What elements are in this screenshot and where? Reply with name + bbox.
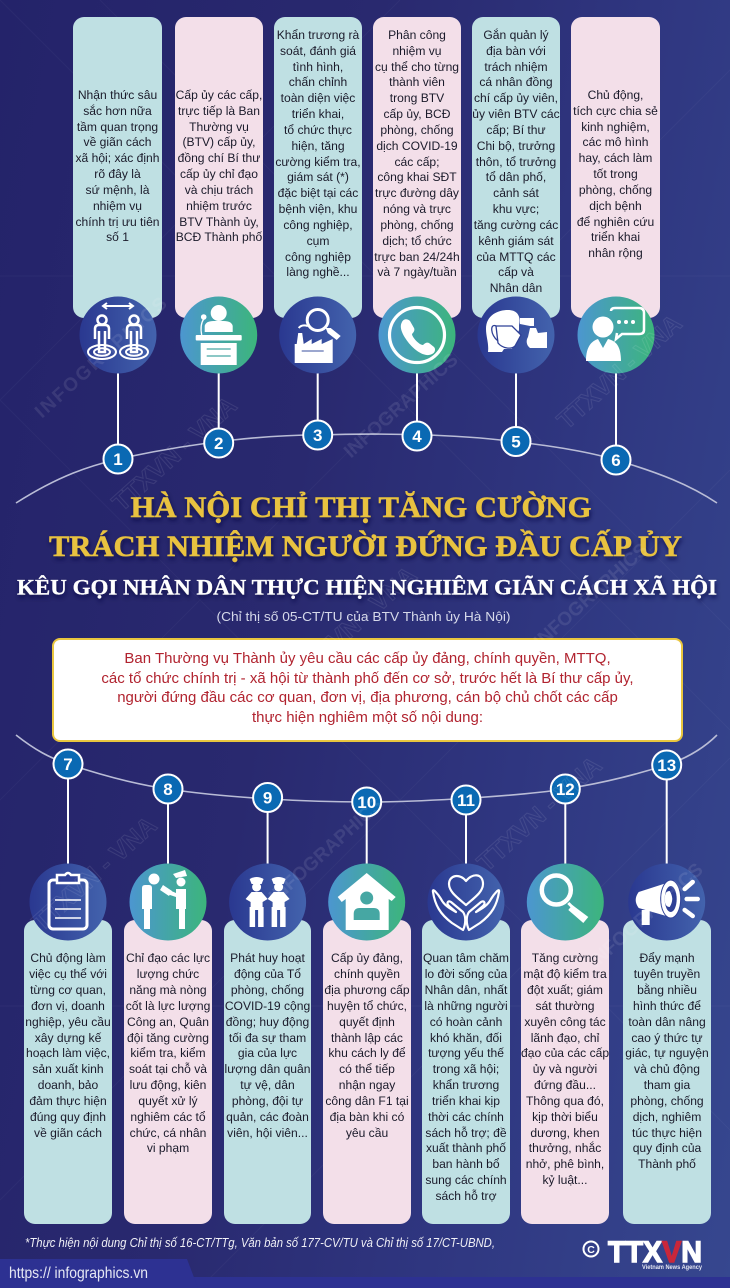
panel 2: Cấp ủy các cấp, — [176, 88, 262, 102]
panel 13: quy định của — [633, 1141, 701, 1155]
icon: officer checks person — [130, 864, 206, 940]
watermarks: INFOGRAPHICS — [585, 859, 707, 972]
panel 8: soát tại chỗ và — [129, 1062, 207, 1076]
panel 1: tầm quan trọng — [77, 120, 158, 134]
panel 3: giám sát (*) — [287, 170, 349, 184]
panel 2: BCĐ Thành phố — [176, 230, 262, 244]
panel 3: đặc biệt tại các — [278, 186, 358, 200]
panel 3: cụm — [307, 234, 329, 248]
panel 3: triển khai, — [292, 107, 344, 121]
icon: two police officers — [229, 864, 306, 940]
panel 5: kênh giám sát — [478, 234, 554, 248]
panel 6: nhân rộng — [588, 246, 643, 260]
panel 8: lưu động, kiên — [130, 1078, 206, 1092]
panel 7: Chủ động làm — [30, 951, 106, 965]
bottom arc — [16, 735, 717, 802]
panel 4: trong BTV — [390, 91, 444, 105]
panel 3: công nghiệp — [285, 250, 351, 264]
footnote: *Thực hiện nội dung Chỉ thị số 16-CT/TTg, Văn bản số 177-CV/TU và Chỉ thị số 17/CT-UBND, — [25, 1235, 495, 1250]
connector lines — [68, 372, 667, 865]
panel 10 — [323, 920, 411, 1224]
icon: mask and thermometer — [478, 296, 554, 374]
panel 4: cụ thể cho từng — [375, 60, 459, 74]
panel 4: và 7 ngày/tuần — [377, 265, 457, 279]
panel 13: túc thực hiện — [632, 1126, 702, 1140]
panel 8: chức, cá nhân — [130, 1126, 206, 1140]
badge numbers: 6 — [611, 451, 621, 470]
panel 10: chính quyền — [334, 967, 400, 981]
badge numbers: 3 — [313, 426, 322, 445]
panel 9: phòng, chống — [231, 983, 304, 997]
panel 12: mật độ kiểm tra — [523, 967, 607, 981]
panel 4: thành viên — [389, 75, 445, 89]
panel 4: nhiệm vụ — [392, 44, 442, 58]
panel 5: của MTTQ các — [476, 250, 556, 264]
panel 4 — [373, 17, 461, 318]
panel 3: tổ chức thực — [284, 123, 352, 137]
panel 1: Nhận thức sâu — [78, 88, 157, 102]
panel 12 — [521, 920, 609, 1224]
icon: podium — [180, 296, 257, 374]
panel 9 — [224, 920, 311, 1224]
panel 10: địa bàn khi có — [330, 1110, 404, 1124]
panel 3 — [274, 17, 362, 318]
icon: house with person — [328, 864, 405, 940]
panel 5: địa bàn với — [486, 44, 546, 58]
panel 11: lo đời sống của — [425, 967, 507, 981]
callout box: các tổ chức chính trị - xã hội từ thành phố đến cơ sở, trước hết là Bí thư cấp ủy, — [101, 670, 634, 687]
panel 4: dịch COVID-19 — [376, 139, 458, 153]
watermarks: TTXVN - VNA — [472, 751, 607, 877]
panel 1: nhiệm vụ — [93, 199, 142, 213]
panel 6: các mô hình — [583, 135, 648, 149]
watermarks: TTXVN - VNA — [27, 811, 162, 937]
icon: social distancing — [80, 296, 156, 374]
panel 4: dịch; tổ chức — [382, 234, 452, 248]
panel 12: kịp thời biểu — [532, 1110, 598, 1124]
panel 11: khó khăn, đối — [430, 1031, 502, 1045]
panel 11 — [422, 920, 510, 1224]
panel 5: cá nhân đồng — [479, 75, 553, 89]
badge numbers: 7 — [63, 755, 73, 774]
panel 2: BTV Thành ủy, — [179, 215, 259, 229]
panel 5: khu vực; — [493, 202, 539, 216]
panel 6: tích cực chia sẻ — [573, 104, 658, 118]
panel 12: đột xuất; giám — [527, 983, 603, 997]
panel 12: ủy và người — [533, 1062, 597, 1076]
panel 13: Đẩy mạnh — [639, 951, 695, 965]
panel 6: dịch bệnh — [589, 199, 642, 213]
panel 11: xuất thành phố — [426, 1141, 506, 1155]
panel 7: đơn vị, doanh — [31, 999, 105, 1013]
panel 12: nhở, phê bình, — [526, 1157, 604, 1171]
logo TTXVN: Vietnam News Agency — [642, 1265, 703, 1271]
source note: (Chỉ thị số 05-CT/TU của BTV Thành ủy Hà Nội) — [216, 609, 510, 624]
panel 13: hình thức để — [633, 999, 701, 1013]
panel 1: rõ đây là — [94, 167, 141, 181]
top arc — [16, 434, 717, 503]
panel 13 — [623, 920, 711, 1224]
panel 10: quyết định — [339, 1015, 395, 1029]
panel 11: là những người — [424, 999, 508, 1013]
badge numbers: 12 — [556, 780, 575, 799]
panel 8: kiểm tra, kiểm — [130, 1046, 206, 1060]
callout box: Ban Thường vụ Thành ủy yêu cầu các cấp ủy đảng, chính quyền, MTTQ, — [124, 650, 611, 667]
badge numbers: 5 — [511, 432, 521, 452]
watermarks: TTXVN - VNA — [107, 391, 242, 517]
callout box: thực hiện nghiêm một số nội dung: — [252, 709, 483, 726]
panel 4: trực đường dây — [375, 186, 459, 200]
panel 10: yêu cầu — [346, 1126, 388, 1140]
panel 11: tượng yếu thế — [428, 1046, 504, 1060]
panel 12: Tăng cường — [532, 951, 598, 965]
panel 7: đúng quy định — [30, 1110, 106, 1124]
panel 11: sách hỗ trợ — [435, 1189, 497, 1203]
panel 5: tổ dân phố, — [486, 170, 546, 184]
callout box: người đứng đầu các cơ quan, đơn vị, địa phương, cán bộ chủ chốt các cấp — [117, 689, 618, 706]
icon: clipboard — [30, 864, 106, 940]
panel 9: Phát huy hoạt — [230, 951, 305, 965]
watermarks: INFOGRAPHICS — [530, 539, 652, 652]
panel 9: tự vệ, dân — [240, 1078, 295, 1092]
title line 2: TRÁCH NHIỆM NGƯỜI ĐỨNG ĐẦU CẤP ỦY — [49, 529, 682, 563]
panel 13: cao ý thức tự — [631, 1031, 703, 1045]
panel 13: phòng, chống — [630, 1094, 704, 1108]
panel 11: triển khai kịp — [432, 1094, 500, 1108]
panel 7 — [24, 920, 112, 1224]
panel 12: thưởng, nhắc — [529, 1141, 601, 1155]
panel 9: COVID-19 cộng — [225, 999, 310, 1013]
panel 12: đứng đầu... — [534, 1078, 596, 1092]
callout box — [52, 638, 683, 742]
panel 11: Nhân dân, nhất — [425, 983, 507, 997]
panel 10: khu cách ly để — [328, 1046, 406, 1060]
panel 13: và chủ động — [634, 1062, 700, 1076]
panel 3: soát, đánh giá — [280, 44, 356, 58]
panel 10: công dân F1 tại — [325, 1094, 409, 1108]
badge numbers: 4 — [412, 427, 422, 446]
panel 4: Phân công — [388, 28, 446, 42]
panel 1 — [73, 17, 162, 318]
panel 1: xã hội; xác định — [75, 151, 160, 165]
panel 9: gia của lực — [238, 1046, 297, 1060]
panel 7: doanh, bảo — [38, 1078, 98, 1092]
panel 4: phòng, chống — [380, 123, 454, 137]
panel 2: trực tiếp là Ban — [178, 104, 260, 118]
icon: factory inspection — [279, 296, 356, 374]
panel 1: số 1 — [106, 230, 129, 244]
panel 13: tham gia — [644, 1078, 690, 1092]
panel 10: nhận ngay — [339, 1078, 395, 1092]
panel 4: phòng, chống — [380, 218, 454, 232]
panel 8: quyết xử lý — [138, 1094, 198, 1108]
panel 12: Thông qua đó, — [526, 1094, 604, 1108]
panel 8: năng mà nòng — [129, 983, 207, 997]
panel 5: cấp; Bí thư — [486, 123, 546, 137]
panel 11: khẩn trương — [433, 1078, 499, 1092]
panel 8: đội tăng cường — [127, 1031, 209, 1045]
badge numbers: 8 — [163, 780, 173, 799]
panel 11: thời các chính — [428, 1110, 504, 1124]
panel 10: thành lập các — [331, 1031, 403, 1045]
panel 13: dịch, nghiêm — [633, 1110, 701, 1124]
panel 8: lượng chức — [137, 967, 199, 981]
panel 9: đồng; huy động — [226, 1015, 309, 1029]
panel 9: phòng, đội tự — [232, 1094, 303, 1108]
panel 9: quản, các đoàn — [226, 1110, 309, 1124]
icon: phone — [378, 296, 456, 374]
panel 9: tối đa sự tham — [229, 1031, 306, 1045]
logo TTXVN: TTXVN — [608, 1236, 702, 1269]
watermarks: TTXVN - VNA — [552, 309, 687, 435]
panel 6: phòng, chống — [579, 183, 652, 197]
panel 4: công khai SĐT — [377, 170, 457, 184]
badge numbers: 10 — [357, 793, 376, 812]
watermarks: TTXVN - VNA — [287, 561, 422, 687]
watermarks: INFOGRAPHICS — [31, 293, 172, 423]
panel 2: (BTV) cấp ủy, — [182, 135, 256, 149]
panel 7: về giãn cách — [34, 1126, 102, 1140]
panel 8: Công an, Quân — [127, 1015, 209, 1029]
badge numbers: 1 — [113, 450, 123, 469]
panel 3: công nghiệp, — [283, 218, 353, 232]
panel 8: vi phạm — [147, 1141, 189, 1155]
badge numbers: 13 — [657, 756, 676, 775]
panel 3: Khẩn trương rà — [277, 28, 359, 42]
footer band — [0, 1259, 730, 1288]
badge numbers: 11 — [457, 791, 475, 810]
panel 13: bằng nhiều — [637, 983, 697, 997]
panel 13: toàn dân nâng — [628, 1015, 706, 1029]
panel 5: trách nhiệm — [484, 60, 548, 74]
panel 7: xây dựng kế — [35, 1031, 101, 1045]
panel 3: hiện, tăng — [291, 139, 345, 153]
badge numbers: 9 — [263, 788, 272, 808]
panel 3: chấn chỉnh — [289, 75, 347, 89]
panel 11: trong xã hội; — [433, 1062, 499, 1076]
panel 7: nghiệp, yêu cầu — [25, 1015, 111, 1029]
panel 11: ban hành bổ — [432, 1157, 500, 1171]
panel 13: tuyên truyền — [634, 967, 700, 981]
badge numbers — [63, 426, 676, 812]
title line 1: HÀ NỘI CHỈ THỊ TĂNG CƯỜNG — [130, 491, 592, 524]
panel 4: trực ban 24/24h — [374, 250, 460, 264]
panel 3: làng nghề... — [286, 265, 350, 279]
panel 4: nóng và trực — [383, 202, 451, 216]
panel 11: Quan tâm chăm — [423, 951, 509, 965]
panel 3: bệnh viện, khu — [279, 202, 357, 216]
icon: heart and hands — [428, 864, 504, 940]
icon: person speech bubble — [578, 296, 654, 374]
panel 8: cốt là lực lượng — [126, 999, 210, 1013]
panel 5 — [472, 17, 560, 318]
panel 1: về giãn cách — [84, 135, 151, 149]
panel 11: có hoàn cảnh — [430, 1015, 502, 1029]
panel 12: sát thường — [535, 999, 595, 1013]
website url: https:// infographics.vn — [9, 1265, 148, 1282]
panel 10: huyện tổ chức, — [327, 999, 407, 1013]
panel 3: toàn diện việc — [281, 91, 355, 105]
panel 11: sách hỗ trợ; đề — [425, 1126, 507, 1140]
panel 5: tăng cường các — [474, 218, 558, 232]
panel 1: chính trị ưu tiên — [75, 215, 160, 229]
panel 1: sứ mệnh, là — [86, 183, 149, 197]
panel 6: triển khai — [591, 230, 640, 244]
panel 5: cấp và — [498, 265, 534, 279]
panel 5: Nhân dân — [490, 281, 542, 295]
panel 3: cường kiểm tra, — [275, 155, 361, 169]
badge numbers: 2 — [214, 434, 223, 453]
icon: megaphone — [628, 864, 705, 940]
panel 2: và chịu trách — [185, 183, 253, 197]
panel 12: kỷ luật... — [542, 1173, 588, 1187]
panel 10: có thể tiếp — [339, 1062, 395, 1076]
icon: magnifier — [527, 864, 604, 940]
logo TTXVN: C — [587, 1244, 595, 1256]
panel 7: hoạch làm việc, — [26, 1046, 110, 1060]
panel 10: Cấp ủy đảng, — [331, 951, 403, 965]
subtitle: KÊU GỌI NHÂN DÂN THỰC HIỆN NGHIÊM GIÃN CÁCH XÃ HỘI — [17, 574, 717, 600]
panel 12: xuyên công tác — [524, 1015, 606, 1029]
panel 5: cảnh sát — [493, 186, 539, 200]
panel 2: nhiệm trước — [186, 199, 252, 213]
panel 13: Thành phố — [638, 1157, 696, 1171]
panel 4: các cấp; — [394, 155, 440, 169]
panel 11: sung các chính — [425, 1173, 507, 1187]
panel 2: đồng chí Bí thư — [178, 151, 260, 165]
panel 7: sản xuất kinh — [32, 1062, 104, 1076]
panel 7: đảm thực hiện — [29, 1094, 107, 1108]
panel 9: lượng dân quân — [225, 1062, 310, 1076]
panel 8: nghiêm các tổ — [130, 1110, 206, 1124]
panel 13: giác, tự nguyện — [625, 1046, 709, 1060]
panel 10: địa phương cấp — [324, 983, 410, 997]
watermarks: INFOGRAPHICS — [340, 349, 462, 462]
panel 9: động của Tổ — [234, 967, 301, 981]
panel 2 — [175, 17, 263, 318]
heading — [17, 491, 717, 600]
panel 12: dương, khen — [530, 1126, 600, 1140]
panel 5: Chi bộ, trưởng — [477, 139, 555, 153]
panel 2: cấp ủy chỉ đạo — [180, 167, 258, 181]
panel 6: kinh nghiệm, — [581, 120, 650, 134]
panel 8: Chỉ đạo các lực — [126, 951, 210, 965]
watermarks: INFOGRAPHICS — [265, 794, 387, 907]
panel 8 — [124, 920, 212, 1224]
panel 6: Chủ động, — [588, 88, 643, 102]
panel 5: thôn, tổ trưởng — [476, 155, 556, 169]
panel 2: Thường vụ — [189, 120, 249, 134]
panel 12: lãnh đạo, chỉ — [531, 1031, 599, 1045]
panel 5: chí cấp ủy viên, — [474, 91, 558, 105]
panel 5: Gắn quản lý — [483, 28, 549, 42]
panel 7: từng cơ quan, — [30, 983, 106, 997]
panel 7: việc cụ thể với — [29, 967, 107, 981]
panel 6: để nghiên cứu — [577, 215, 654, 229]
panel 9: viên, hội viên... — [227, 1126, 308, 1140]
number badges — [54, 420, 681, 816]
panel 1: sắc hơn nữa — [83, 104, 152, 118]
panel 3: tình hình, — [293, 60, 343, 74]
panel 6 — [571, 17, 660, 318]
panel 5: ủy viên BTV các — [472, 107, 560, 121]
panel 4: cấp ủy, BCĐ — [384, 107, 450, 121]
panel 6: tốt trong — [593, 167, 638, 181]
panel 6: hay, cách làm — [579, 151, 652, 165]
panel 12: đạo của các cấp — [521, 1046, 609, 1060]
